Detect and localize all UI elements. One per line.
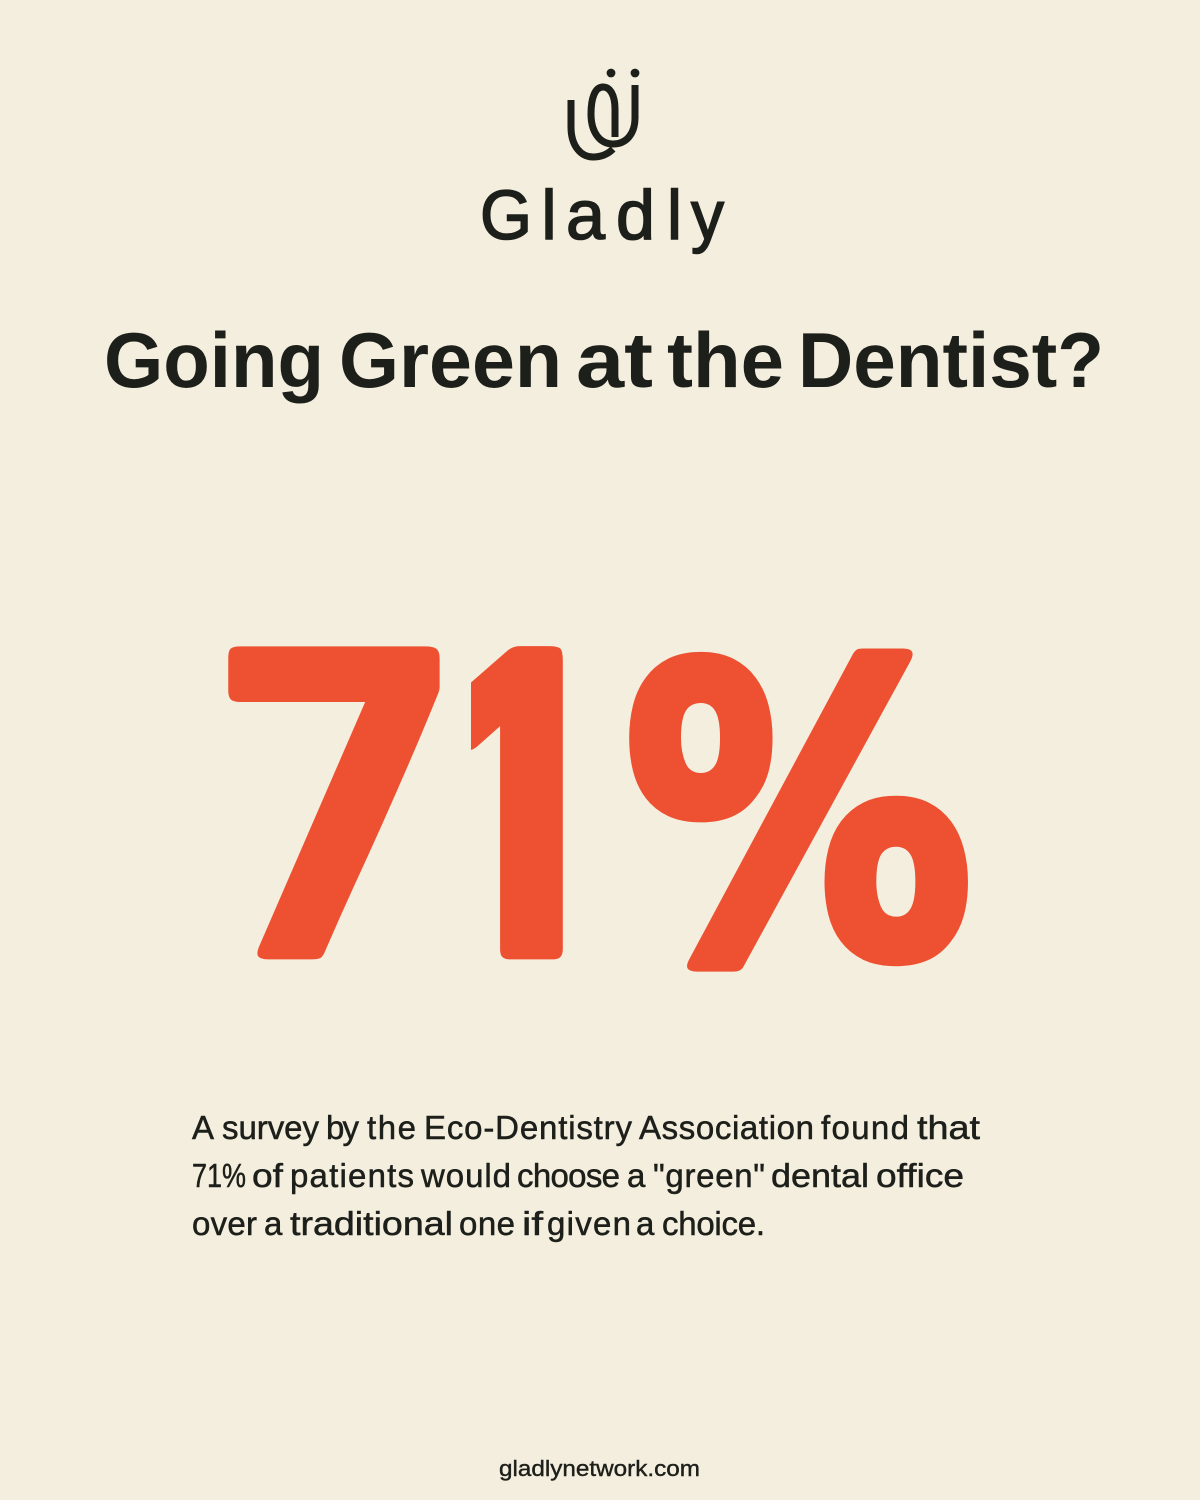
body paragraph: of [252, 1157, 284, 1194]
body paragraph: that [917, 1109, 980, 1146]
wordmark: Gladly: l [667, 176, 682, 254]
wordmark: Gladly: y [691, 176, 724, 254]
body paragraph: if [522, 1205, 544, 1242]
body paragraph: given [547, 1205, 631, 1242]
body paragraph: a [636, 1205, 655, 1242]
wordmark: Gladly: a [566, 176, 605, 254]
body paragraph: 71% [192, 1157, 246, 1194]
title [104, 316, 1104, 404]
title: Going [104, 316, 324, 404]
body paragraph: survey [222, 1109, 320, 1146]
big statistic: 71%: 1 [393, 615, 652, 1014]
icon: Gladly mark [571, 69, 639, 157]
body paragraph: patients [290, 1157, 414, 1194]
body paragraph: choice. [662, 1205, 765, 1242]
footer url: gladlynetwork.com [499, 1456, 700, 1481]
body paragraph [192, 1109, 980, 1242]
body paragraph: traditional [290, 1205, 453, 1242]
body paragraph: Association [639, 1109, 814, 1146]
wordmark: Gladly [480, 176, 724, 254]
body paragraph: office [876, 1157, 964, 1194]
big statistic: 71%: 7 [204, 614, 469, 1015]
title: Dentist? [798, 316, 1104, 404]
wordmark: Gladly: l [542, 176, 556, 254]
body paragraph: "green" [653, 1157, 765, 1194]
wordmark: Gladly: G [480, 176, 532, 254]
wordmark: Gladly: d [616, 176, 655, 254]
body paragraph: by [326, 1109, 360, 1146]
body paragraph: would [420, 1157, 511, 1194]
body paragraph: A [192, 1109, 214, 1146]
body paragraph: dental [771, 1157, 869, 1194]
big statistic: 71% [228, 646, 968, 972]
big statistic: 71%: % [588, 627, 1002, 1019]
body paragraph: a [264, 1205, 283, 1242]
body paragraph: one [459, 1205, 515, 1242]
logo: Gladly mark and wordmark [480, 69, 724, 254]
body paragraph: a [627, 1157, 646, 1194]
title: at [576, 316, 653, 404]
title: the [667, 316, 784, 404]
title: Green [339, 316, 562, 404]
body paragraph: the [367, 1109, 416, 1146]
body paragraph: found [821, 1109, 909, 1146]
body paragraph: over [192, 1205, 257, 1242]
body paragraph: choose [517, 1157, 620, 1194]
body paragraph: Eco-Dentistry [424, 1109, 632, 1146]
